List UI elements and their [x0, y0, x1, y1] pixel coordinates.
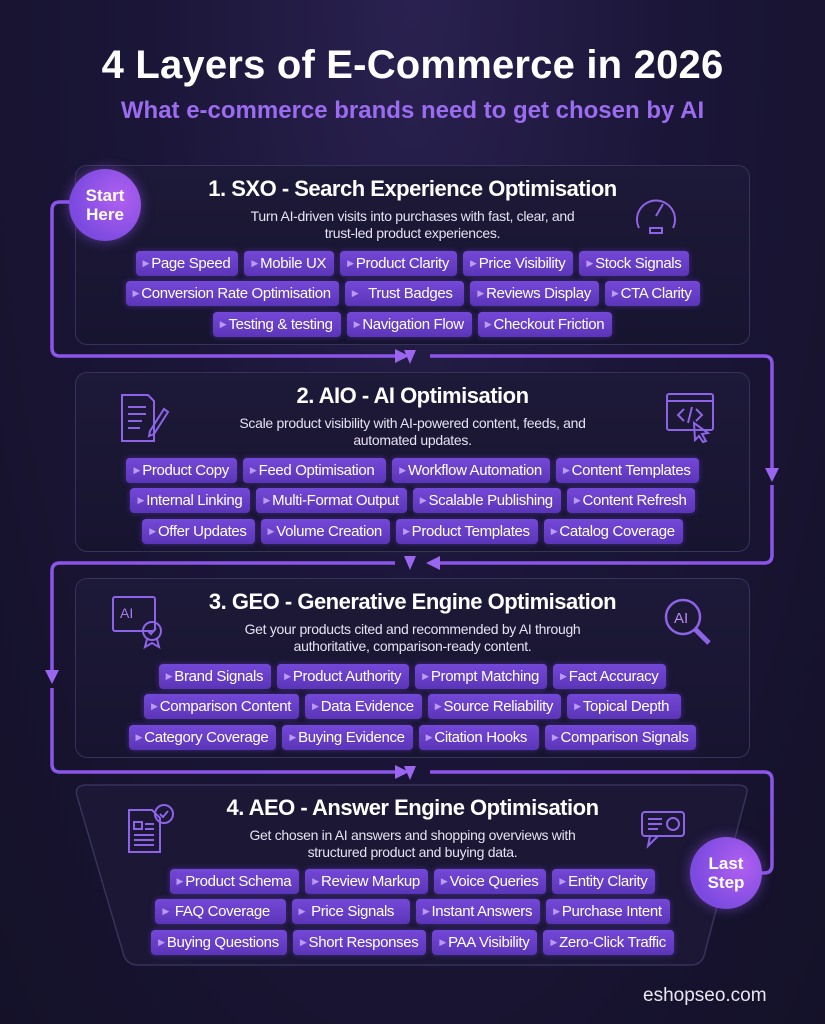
- panel: SXO: trust-led product experiences.: [325, 225, 500, 241]
- panel: AIO: Scale product visibility with AI-powered content, feeds, and: [239, 415, 586, 431]
- panel: SXO: Navigation Flow: [362, 316, 464, 333]
- panel: GEO: Topical Depth: [583, 698, 669, 715]
- panel: GEO: Citation Hooks: [434, 729, 527, 746]
- panel: AIO: Catalog Coverage: [559, 523, 675, 540]
- panel: GEO: Comparison Signals: [561, 729, 688, 746]
- icon: checked document: [128, 804, 174, 853]
- panel: AEO: Short Responses: [309, 934, 418, 951]
- panel: AEO: structured product and buying data.: [308, 844, 517, 860]
- icon: AI certificate: [112, 596, 162, 649]
- panel: AIO: Product Templates: [412, 523, 530, 540]
- panel: GEO: Data Evidence: [321, 698, 414, 715]
- panel: GEO: Prompt Matching: [431, 668, 539, 685]
- panel: AIO: [75, 372, 750, 552]
- panel: SXO: 1. SXO - Search Experience Optimisation: [208, 176, 617, 201]
- panel: SXO: Mobile UX: [260, 255, 326, 272]
- last step badge: [690, 837, 762, 909]
- icon: AI certificate: AI: [120, 605, 133, 621]
- last step badge: Last: [709, 854, 743, 873]
- panel: AEO: FAQ Coverage: [175, 903, 270, 920]
- panel: AEO: Buying Questions: [167, 934, 279, 951]
- panel: AEO: Product Schema: [185, 873, 291, 890]
- start here badge: Start: [86, 186, 124, 205]
- start here badge: Here: [86, 205, 124, 224]
- icon: AI magnifier: AI: [674, 610, 688, 627]
- panel: AIO: 2. AIO - AI Optimisation: [296, 383, 529, 408]
- panel: AIO: Content Templates: [572, 462, 691, 479]
- panel: AIO: Internal Linking: [146, 492, 242, 509]
- panel: SXO: Trust Badges: [368, 285, 453, 302]
- last step badge: Step: [708, 873, 744, 892]
- panel: SXO: Product Clarity: [356, 255, 449, 272]
- panel: AEO: 4. AEO - Answer Engine Optimisation: [226, 795, 599, 820]
- panel: AEO: Get chosen in AI answers and shopping overviews with: [249, 827, 576, 843]
- panel: AEO: Price Signals: [311, 903, 394, 920]
- footer url: eshopseo.com: [643, 985, 767, 1006]
- panel: AIO: Volume Creation: [276, 523, 382, 540]
- panel: GEO: [75, 578, 750, 758]
- panel: GEO: Buying Evidence: [298, 729, 405, 746]
- panel: SXO: [75, 165, 750, 345]
- panel: AIO: automated updates.: [353, 432, 472, 448]
- panel: SXO: Reviews Display: [486, 285, 591, 302]
- panel: AEO: Voice Queries: [450, 873, 538, 890]
- panel: SXO: CTA Clarity: [621, 285, 692, 302]
- panel: SXO: Conversion Rate Optimisation: [141, 285, 331, 302]
- panel: AIO: Workflow Automation: [408, 462, 542, 479]
- icon: code window: [666, 393, 714, 444]
- panel: AEO: Instant Answers: [431, 903, 532, 920]
- start here badge: [69, 169, 141, 241]
- panel: AEO: Purchase Intent: [562, 903, 662, 920]
- icon: speedometer: [636, 200, 676, 234]
- icon: AI magnifier: [664, 598, 711, 645]
- panel: AEO: PAA Visibility: [448, 934, 529, 951]
- panel: GEO: 3. GEO - Generative Engine Optimisation: [209, 589, 616, 614]
- panel: AEO: Review Markup: [321, 873, 420, 890]
- panel: GEO: authoritative, comparison-ready content.: [294, 638, 531, 654]
- icon: chat bubble: [641, 811, 685, 849]
- panel: AIO: Product Copy: [142, 462, 229, 479]
- panel: AEO: [76, 784, 748, 966]
- panel: SXO: Checkout Friction: [494, 316, 604, 333]
- panel: SXO: Turn AI-driven visits into purchases with fast, clear, and: [251, 208, 574, 224]
- subtitle: What e-commerce brands need to get chosen by AI: [121, 97, 704, 124]
- panel: AEO: Zero-Click Traffic: [559, 934, 666, 951]
- panel: GEO: Get your products cited and recommended by AI through: [245, 621, 580, 637]
- panel: GEO: Category Coverage: [144, 729, 268, 746]
- panel: GEO: Product Authority: [293, 668, 401, 685]
- panel: GEO: Source Reliability: [444, 698, 553, 715]
- panel: AIO: Scalable Publishing: [429, 492, 553, 509]
- icon: document pen: [121, 394, 170, 442]
- panel: SXO: Price Visibility: [479, 255, 565, 272]
- panel: GEO: Fact Accuracy: [569, 668, 658, 685]
- panel: AIO: Feed Optimisation: [259, 462, 374, 479]
- panel: GEO: Brand Signals: [174, 668, 263, 685]
- panel: SXO: Stock Signals: [595, 255, 681, 272]
- panel: AIO: Multi-Format Output: [272, 492, 399, 509]
- panel: AIO: Content Refresh: [583, 492, 687, 509]
- title: 4 Layers of E-Commerce in 2026: [102, 43, 723, 87]
- panel: AIO: Offer Updates: [158, 523, 247, 540]
- panel: GEO: Comparison Content: [160, 698, 291, 715]
- panel: SXO: Testing & testing: [228, 316, 333, 333]
- panel: AEO: Entity Clarity: [568, 873, 647, 890]
- panel: SXO: Page Speed: [151, 255, 230, 272]
